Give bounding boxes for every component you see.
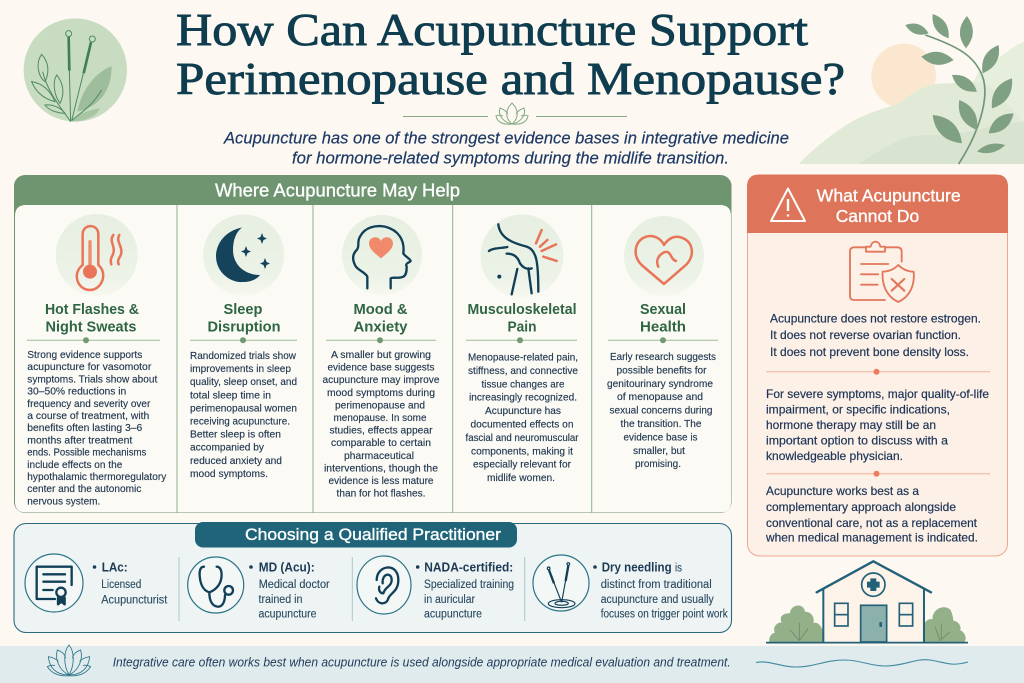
text block: hormone therapy bbox=[766, 387, 989, 463]
panel: what acupuncture cannot do bbox=[747, 174, 1008, 556]
column: hot flashes bbox=[27, 214, 167, 507]
subtitle bbox=[223, 128, 789, 168]
text block: complementary approach: Acupuncture works best as a bbox=[766, 484, 919, 498]
icon: head with heart bbox=[342, 215, 422, 295]
body text: promising. bbox=[635, 458, 681, 470]
text block: complementary approach: conventional care, not as a replacement bbox=[766, 516, 978, 530]
text bbox=[249, 560, 330, 621]
body text: Strong evidence supports bbox=[27, 349, 142, 361]
item: dry needling bbox=[533, 555, 728, 621]
column: mood and anxiety bbox=[322, 215, 440, 500]
text: acupuncture bbox=[258, 609, 316, 621]
heading bbox=[640, 301, 686, 336]
body text: menopause. In some bbox=[334, 412, 427, 424]
footer band bbox=[0, 645, 1024, 683]
body text: center and the autonomic bbox=[27, 483, 141, 495]
illustration: clinic house with shrubs bbox=[766, 561, 968, 643]
subtitle: Acupuncture has one of the strongest evidence bases in integrative medicine bbox=[223, 128, 789, 148]
body text: possible benefits for bbox=[616, 364, 707, 376]
text block: hormone therapy: impairment, or specific indications, bbox=[766, 402, 950, 416]
icon: needles in skin bbox=[533, 555, 589, 611]
heading: Hot Flashes & bbox=[45, 301, 139, 318]
heading: Musculoskeletal bbox=[468, 301, 576, 318]
panel: where acupuncture may help bbox=[14, 175, 732, 513]
body text: Better sleep is often bbox=[190, 429, 281, 441]
text block: limitations: It does not prevent bone density loss. bbox=[770, 345, 969, 359]
body text bbox=[466, 352, 579, 484]
body text bbox=[27, 349, 167, 507]
body text: sexual concerns during bbox=[610, 405, 713, 417]
body text: increasingly recognized. bbox=[469, 392, 577, 404]
body text: comparable to certain bbox=[331, 437, 431, 449]
body text: hypothalamic thermoregulatory bbox=[27, 471, 167, 483]
heading bbox=[208, 301, 280, 336]
body text: frequency and severity over bbox=[27, 398, 151, 410]
body text: pharmaceutical bbox=[344, 450, 414, 462]
text block: hormone therapy: knowledgeable physician. bbox=[766, 449, 903, 463]
body text bbox=[190, 350, 297, 480]
body text: Acupuncture has bbox=[485, 405, 561, 417]
text block: limitations: Acupuncture does not restore estrogen. bbox=[770, 312, 981, 326]
subtitle: for hormone-related symptoms during the midlife transition. bbox=[292, 148, 729, 168]
panel heading bbox=[195, 522, 517, 548]
body text: than for hot flashes. bbox=[336, 488, 426, 500]
body text: interventions, though the bbox=[324, 462, 438, 474]
panel: choosing a qualified practitioner bbox=[14, 522, 732, 632]
heading bbox=[468, 301, 576, 336]
body text: a course of treatment, with bbox=[27, 410, 149, 422]
body text: months after treatment bbox=[27, 434, 132, 446]
body text: midlife women. bbox=[487, 472, 555, 484]
text block: limitations bbox=[770, 312, 981, 359]
body text: evidence base is bbox=[624, 431, 698, 443]
panel heading: Cannot Do bbox=[836, 206, 919, 226]
item: LAc bbox=[25, 554, 168, 612]
text block: complementary approach: when medical management is indicated. bbox=[765, 531, 978, 545]
title bbox=[176, 4, 845, 104]
body text: accompanied by bbox=[190, 442, 265, 454]
text block: hormone therapy: hormone therapy may still be an bbox=[766, 418, 936, 432]
body text: tissue changes are bbox=[482, 378, 565, 390]
text block: complementary approach bbox=[765, 484, 978, 545]
panel heading: What Acupuncture bbox=[817, 186, 961, 206]
body text: especially relevant for bbox=[473, 459, 571, 471]
body text: total sleep time in bbox=[190, 389, 271, 401]
column: musculoskeletal pain bbox=[466, 214, 579, 484]
body text: genitourinary syndrome bbox=[607, 378, 713, 390]
body text: include effects on the bbox=[27, 459, 122, 471]
text: distinct from traditional bbox=[601, 579, 712, 591]
text block: hormone therapy: important option to discuss with a bbox=[766, 434, 948, 448]
icon: certificate bbox=[25, 554, 83, 612]
body text: Early research suggests bbox=[610, 351, 716, 363]
body text: components, making it bbox=[471, 445, 573, 457]
text block: hormone therapy: For severe symptoms, major quality-of-life bbox=[766, 387, 989, 401]
body text: quality, sleep onset, and bbox=[190, 376, 297, 388]
text: in auricular bbox=[424, 594, 475, 606]
body text bbox=[322, 349, 440, 500]
heading: Pain bbox=[508, 319, 536, 336]
body text: improvements in sleep bbox=[190, 363, 291, 375]
heading: Anxiety bbox=[354, 319, 408, 336]
icon: shoulder with pain rays bbox=[480, 214, 564, 298]
body text: fascial and neuromuscular bbox=[466, 432, 579, 444]
body text: A smaller but growing bbox=[331, 349, 431, 361]
body text: acupuncture may improve bbox=[322, 374, 440, 386]
body text: studies, effects appear bbox=[330, 425, 433, 437]
item: MD (Acu) bbox=[188, 557, 330, 621]
icon: ear bbox=[357, 556, 411, 614]
heading: Disruption bbox=[208, 319, 280, 336]
title divider with lotus bbox=[403, 103, 627, 124]
title: Perimenopause and Menopause? bbox=[176, 53, 845, 104]
text: is bbox=[675, 563, 682, 575]
text: LAc: bbox=[102, 560, 128, 575]
heading: Sexual bbox=[640, 301, 686, 318]
icon: clipboard with shield bbox=[850, 242, 914, 302]
panel heading bbox=[817, 186, 961, 226]
heading: Sleep bbox=[224, 301, 262, 318]
icon: crescent moon and stars bbox=[203, 214, 284, 296]
text: acupuncture and usually bbox=[601, 594, 714, 606]
panel heading: Where Acupuncture May Help bbox=[215, 181, 460, 201]
text: focuses on trigger point work bbox=[601, 609, 728, 621]
text: Medical doctor bbox=[259, 579, 330, 591]
text block: complementary approach: complementary approach alongside bbox=[766, 500, 956, 514]
icon: stethoscope bbox=[188, 557, 244, 613]
body text: the transition. The bbox=[620, 418, 702, 430]
body text: receiving acupuncture. bbox=[190, 416, 290, 428]
text bbox=[93, 560, 168, 607]
item: NADA-certified bbox=[357, 556, 514, 621]
footer message: Integrative care often works best when acupuncture is used alongside appropriate medical evaluation and treatment. bbox=[113, 655, 731, 670]
body text: documented effects on bbox=[470, 418, 574, 430]
body text: evidence base suggests bbox=[328, 362, 434, 374]
text: acupuncture bbox=[424, 609, 482, 621]
body text: benefits often lasting 3–6 bbox=[27, 422, 142, 434]
body text: acupuncture for vasomotor bbox=[27, 361, 152, 373]
heading bbox=[45, 301, 139, 336]
body text: reduced anxiety and bbox=[190, 455, 282, 467]
text: trained in bbox=[258, 594, 302, 606]
text bbox=[593, 560, 728, 621]
icon: lotus bbox=[47, 645, 91, 676]
body text: of menopause and bbox=[617, 391, 703, 403]
body text: Randomized trials show bbox=[190, 350, 296, 362]
text: Acupuncturist bbox=[101, 595, 168, 607]
body text: symptoms. Trials show about bbox=[27, 373, 157, 385]
heading: Health bbox=[640, 319, 686, 336]
heading bbox=[354, 301, 408, 336]
column: sleep disruption bbox=[190, 214, 297, 480]
body text: Menopause-related pain, bbox=[468, 352, 578, 364]
text: Licensed bbox=[101, 579, 141, 591]
body text: smaller, but bbox=[633, 445, 685, 457]
illustration: hills, sun and leafy branch bbox=[799, 14, 1024, 164]
text: Specialized training bbox=[424, 579, 514, 591]
text: Dry needling bbox=[602, 560, 672, 575]
icon: warning triangle bbox=[771, 188, 805, 221]
body text: evidence is less mature bbox=[328, 475, 434, 487]
icon: heart outline bbox=[624, 216, 704, 296]
body text: 30–50% reductions in bbox=[27, 386, 126, 398]
body text bbox=[607, 351, 716, 470]
body text: ends. Possible mechanisms bbox=[27, 447, 146, 459]
icon: acupuncture needles and herbs in a green circle bbox=[24, 18, 127, 122]
text bbox=[416, 560, 514, 621]
body text: perimenopause and bbox=[335, 399, 425, 411]
text block: limitations: It does not reverse ovarian function. bbox=[770, 328, 961, 342]
column: sexual health bbox=[607, 216, 718, 470]
title: How Can Acupuncture Support bbox=[176, 4, 808, 55]
icon: thermometer with heat waves bbox=[56, 214, 138, 296]
text: NADA-certified: bbox=[424, 560, 513, 575]
body text: perimenopausal women bbox=[190, 402, 297, 414]
body text: mood symptoms during bbox=[327, 387, 435, 399]
body text: mood symptoms. bbox=[190, 468, 268, 480]
heading: Mood & bbox=[354, 301, 408, 318]
panel heading: Choosing a Qualified Practitioner bbox=[245, 525, 501, 544]
body text: stiffness, and connective bbox=[468, 365, 578, 377]
heading: Night Sweats bbox=[46, 319, 136, 336]
text: MD (Acu): bbox=[259, 560, 315, 575]
body text: nervous system. bbox=[27, 495, 100, 507]
